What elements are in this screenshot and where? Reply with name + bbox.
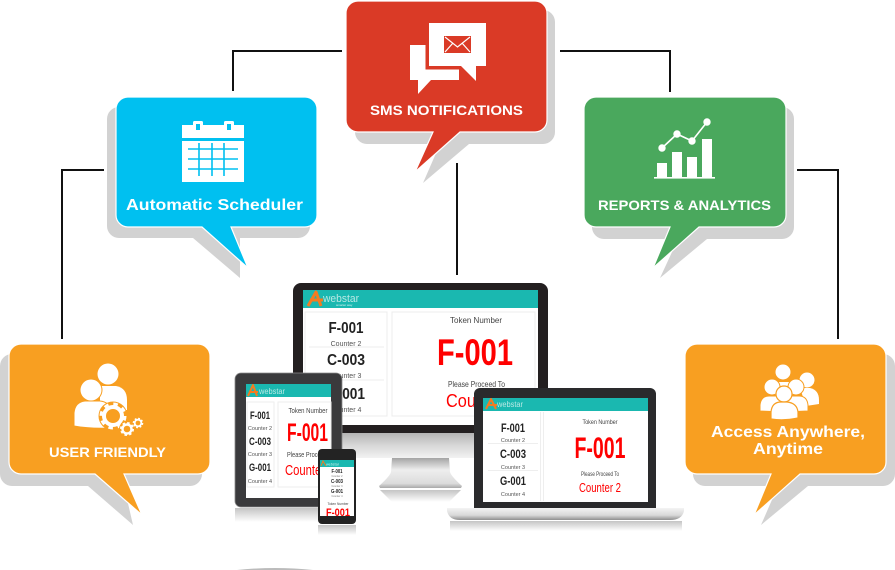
icon: group of people [760,364,819,420]
heading: access anywhere anytime: Anytime [753,441,823,458]
tablet token display: Counter [285,462,325,479]
laptop queue list: Counter 2 [501,438,525,444]
heading: SMS notifications: SMS NOTIFICATIONS [370,102,523,118]
tablet token display: Please Proceed [287,452,327,459]
logo: smarter way [336,303,353,307]
logo: webstar [322,293,359,305]
tablet queue list: Counter 4 [248,479,272,485]
laptop queue list: Counter 4 [501,492,525,498]
monitor token display: Counter [446,391,504,411]
heading: reports and analytics: REPORTS & ANALYTICS [598,197,771,213]
panel: reports and analytics [584,97,794,278]
tablet token display: Token Number [288,408,328,415]
tablet token display: F-001 [287,419,328,447]
laptop token display [574,419,626,495]
panel: automatic scheduler [107,97,317,278]
tablet token display [285,408,328,479]
phone screen text: Counter 2 [332,475,343,478]
panel: SMS notifications [346,1,555,183]
laptop token display: Counter 2 [579,480,621,495]
phone screen text: Token Number [328,502,349,506]
phone screen text: G-001 [331,489,343,495]
laptop token display: Token Number [582,419,618,426]
phone screen text: C-003 [331,479,343,485]
laptop token display: F-001 [574,432,626,465]
device: tablet [235,373,342,522]
heading: access anywhere anytime [711,424,865,458]
logo: webstar [258,387,285,396]
monitor queue list: Counter 4 [331,407,361,414]
monitor token display [437,315,513,411]
laptop token display: Please Proceed To [581,472,619,478]
icon: bar and line chart [654,118,715,179]
connector lines [62,51,838,339]
phone screen text: F-001 [326,507,350,519]
monitor queue list: Counter 2 [331,341,361,348]
icon: users with gears [74,364,142,437]
laptop queue list: C-003 [500,447,526,461]
heading: user friendly: USER FRIENDLY [49,444,167,460]
device: phone [318,449,356,535]
device: desktop monitor [293,283,548,502]
logo: webstar [496,400,523,409]
heading: access anywhere anytime: Access Anywhere, [711,424,865,441]
monitor queue list: C-003 [327,352,365,369]
monitor queue list [327,320,365,414]
tablet queue list: F-001 [250,410,270,422]
phone screen text: Counter 4 [332,495,343,498]
phone screen text: Counter 3 [332,485,343,488]
tablet queue list [248,410,272,485]
tablet queue list: Counter 2 [248,426,272,432]
tablet queue list: Counter 3 [248,452,272,458]
panel: access anywhere [685,344,895,525]
logo [248,385,285,396]
tablet queue list: C-003 [249,436,271,448]
device: laptop [447,388,684,531]
monitor token display: F-001 [437,332,513,373]
panel: user friendly [0,344,210,525]
monitor queue list: Counter 3 [331,373,361,380]
laptop queue list: Counter 3 [501,465,525,471]
monitor token display: Token Number [450,315,502,325]
monitor queue list: F-001 [328,320,364,337]
logo [486,399,523,409]
tablet queue list: G-001 [249,462,271,474]
floor reflection [237,568,313,570]
laptop queue list: G-001 [500,474,526,488]
icon: message bubbles with envelope [410,23,486,94]
laptop queue list [500,421,526,498]
laptop queue list: F-001 [501,421,525,435]
phone screen text: F-001 [332,469,342,475]
monitor token display: Please Proceed To [448,379,505,389]
icon: calendar [182,121,244,182]
monitor queue list: G-001 [327,386,365,403]
logo: webstar [326,462,340,466]
logo [308,292,359,307]
heading: automatic scheduler: Automatic Scheduler [126,197,303,214]
phone screen text [326,469,350,519]
